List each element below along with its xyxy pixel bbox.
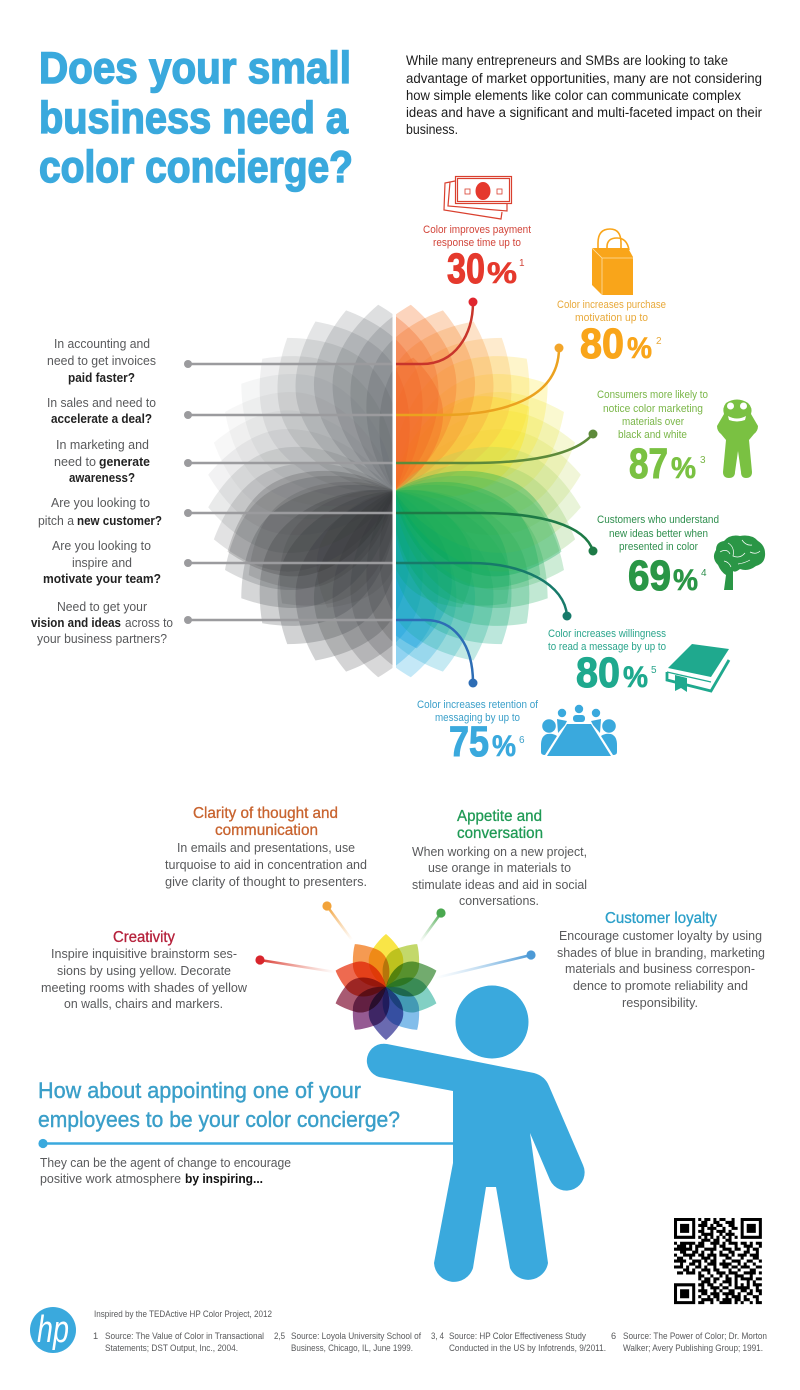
- intro text: advantage of market opportunities, many are not considering: [406, 71, 762, 86]
- left column questions: pitch a: [38, 513, 75, 528]
- stat: purchase motivation: 80: [580, 320, 624, 368]
- concierge headline: [38, 1078, 400, 1132]
- footer sources: Business, Chicago, IL, June 1999.: [291, 1343, 413, 1353]
- stat: payment response: Color improves payment: [423, 224, 532, 236]
- left column questions: your business partners?: [37, 631, 167, 646]
- stat: retention: messaging by up to: [435, 712, 520, 724]
- block: appetite and conversation: [412, 808, 587, 908]
- stat: understand ideas: Customers who understand: [597, 514, 719, 526]
- footer sources: 2,5: [274, 1331, 285, 1341]
- block: creativity: Inspire inquisitive brainstorm ses-: [51, 946, 237, 961]
- footer sources: Statements; DST Output, Inc., 2004.: [105, 1343, 238, 1353]
- concierge headline: employees to be your color concierge?: [38, 1107, 400, 1132]
- left column questions: In sales and need to: [47, 395, 156, 410]
- concierge headline: How about appointing one of your: [38, 1078, 361, 1103]
- icon: brain: [714, 536, 765, 590]
- stat: notice color: [597, 389, 708, 488]
- block: clarity of thought: give clarity of thought to presenters.: [165, 874, 367, 889]
- stat: notice color: materials over: [622, 416, 684, 428]
- left column questions: Are you looking to: [52, 538, 151, 553]
- stat: notice color: 3: [700, 455, 706, 466]
- block: appetite and conversation: conversations.: [459, 893, 539, 908]
- left column questions: accelerate a deal?: [51, 411, 152, 426]
- footer sources: [93, 1331, 767, 1353]
- block: customer loyalty: Encourage customer loyalty by using: [559, 928, 762, 943]
- block: customer loyalty: responsibility.: [622, 995, 698, 1010]
- HP logo: hp: [37, 1309, 69, 1351]
- grey connector lines: [184, 360, 392, 624]
- footer sources: 1: [93, 1331, 98, 1341]
- stat: read a message: to read a message by up to: [548, 641, 666, 653]
- stat: read a message: %: [623, 661, 648, 694]
- stat: retention: Color increases retention of: [417, 699, 539, 711]
- left column questions: motivate your team?: [43, 571, 161, 586]
- block: creativity: on walls, chairs and markers.: [64, 996, 223, 1011]
- block: customer loyalty: [557, 910, 765, 1010]
- left column questions: vision and ideas: [31, 615, 121, 630]
- block: appetite and conversation: conversation: [457, 825, 543, 842]
- stat: notice color: 87: [629, 440, 668, 488]
- left column questions: In accounting and: [54, 336, 150, 351]
- block: customer loyalty: materials and business correspon-: [565, 961, 755, 976]
- block: clarity of thought: communication: [215, 822, 318, 839]
- stat: payment response: %: [487, 257, 517, 290]
- stat: understand ideas: presented in color: [619, 541, 698, 553]
- stat: retention: [417, 699, 539, 766]
- coloured connector curves: [396, 298, 598, 688]
- footer sources: Source: HP Color Effectiveness Study: [449, 1331, 586, 1341]
- title: Does your small: [39, 44, 351, 93]
- title: business need a: [39, 94, 349, 143]
- left column questions: [31, 336, 173, 646]
- left column questions: Need to get your: [57, 599, 148, 614]
- stat: understand ideas: 4: [701, 568, 707, 579]
- title: [39, 44, 353, 192]
- stat: read a message: 5: [651, 665, 657, 676]
- colour wheel: right half: [396, 304, 581, 678]
- stat: purchase motivation: [557, 299, 666, 368]
- stat: notice color: black and white: [618, 429, 687, 441]
- block: clarity of thought: Clarity of thought and: [193, 805, 338, 822]
- block: appetite and conversation: Appetite and: [457, 808, 542, 825]
- stat: payment response: 1: [519, 258, 525, 269]
- footer sources: 3, 4: [431, 1331, 444, 1341]
- icon: meeting table: [541, 705, 617, 756]
- rays from small flower: [255, 901, 536, 978]
- block: creativity: Creativity: [113, 929, 175, 946]
- intro text: [406, 53, 762, 137]
- intro text: While many entrepreneurs and SMBs are looking to take: [406, 53, 728, 68]
- concierge text: by inspiring...: [185, 1171, 263, 1186]
- left column questions: In marketing and: [56, 437, 149, 452]
- stat: retention: 6: [519, 735, 525, 746]
- left column questions: need to: [54, 454, 96, 469]
- concierge text: positive work atmosphere: [40, 1171, 181, 1186]
- small colour flower: [330, 934, 442, 1040]
- stat: retention: %: [492, 730, 516, 763]
- icon: money stack: [444, 176, 512, 219]
- left column questions: need to get invoices: [47, 353, 156, 368]
- footer sources: Source: The Value of Color in Transactional: [105, 1331, 264, 1341]
- icon: book: [667, 644, 729, 692]
- block: customer loyalty: Customer loyalty: [605, 910, 717, 927]
- stat: understand ideas: [597, 514, 719, 600]
- intro text: ideas and have a significant and multi-faceted impact on their: [406, 105, 762, 120]
- stat: payment response: [423, 224, 532, 293]
- block: appetite and conversation: When working on a new project,: [412, 844, 587, 859]
- footer sources: Conducted in the US by Infotrends, 9/2011.: [449, 1343, 606, 1353]
- block: clarity of thought: turquoise to aid in concentration and: [165, 857, 367, 872]
- stat: retention: 75: [449, 718, 489, 766]
- intro text: how simple elements like color can communicate complex: [406, 88, 741, 103]
- icon: shopping bag: [592, 229, 633, 295]
- block: creativity: sions by using yellow. Decorate: [57, 963, 231, 978]
- left column questions: Are you looking to: [51, 495, 150, 510]
- icon: person with binoculars: [717, 400, 758, 478]
- stat: notice color: notice color marketing: [603, 403, 703, 415]
- footer sources: 6: [611, 1331, 616, 1341]
- stat: purchase motivation: motivation up to: [575, 312, 648, 324]
- stat: purchase motivation: Color increases purchase: [557, 299, 666, 311]
- stat: notice color: %: [671, 452, 696, 485]
- stat: purchase motivation: 2: [656, 336, 662, 347]
- stat: understand ideas: 69: [628, 552, 671, 600]
- stat: read a message: 80: [576, 649, 620, 697]
- block: customer loyalty: shades of blue in branding, marketing: [557, 945, 765, 960]
- block: clarity of thought: In emails and presentations, use: [177, 840, 355, 855]
- stat: payment response: response time up to: [433, 237, 521, 249]
- left column questions: inspire and: [72, 555, 132, 570]
- block: clarity of thought: [165, 805, 367, 889]
- pointer line under headline: [38, 1139, 455, 1148]
- block: appetite and conversation: use orange in materials to: [428, 860, 571, 875]
- footer sources: Walker; Avery Publishing Group; 1991.: [623, 1343, 763, 1353]
- stat: understand ideas: new ideas better when: [609, 528, 708, 540]
- block: appetite and conversation: stimulate ideas and aid in social: [412, 877, 587, 892]
- stat: read a message: [548, 628, 666, 697]
- stat: understand ideas: %: [673, 564, 698, 597]
- left column questions: awareness?: [69, 470, 135, 485]
- block: creativity: [41, 929, 248, 1011]
- stat: purchase motivation: %: [627, 332, 652, 365]
- stat: notice color: Consumers more likely to: [597, 389, 708, 401]
- block: creativity: meeting rooms with shades of yellow: [41, 980, 248, 995]
- concierge text: [40, 1155, 291, 1186]
- stat: read a message: Color increases willingness: [548, 628, 666, 640]
- footer credit: Inspired by the TEDActive HP Color Project, 2012: [94, 1309, 272, 1319]
- concierge text: They can be the agent of change to encourage: [40, 1155, 291, 1170]
- greyscale wheel: left half: [208, 304, 392, 678]
- person figure: [367, 986, 585, 1282]
- title: color concierge?: [39, 143, 353, 192]
- intro text: business.: [406, 122, 458, 137]
- QR code: [674, 1219, 762, 1303]
- block: customer loyalty: dence to promote reliability and: [573, 978, 748, 993]
- stat: payment response: 30: [447, 245, 485, 293]
- left column questions: generate: [99, 454, 150, 469]
- footer sources: Source: Loyola University School of: [291, 1331, 421, 1341]
- left column questions: new customer?: [77, 513, 162, 528]
- left column questions: paid faster?: [68, 370, 135, 385]
- footer sources: Source: The Power of Color; Dr. Morton: [623, 1331, 767, 1341]
- left column questions: across to: [125, 615, 173, 630]
